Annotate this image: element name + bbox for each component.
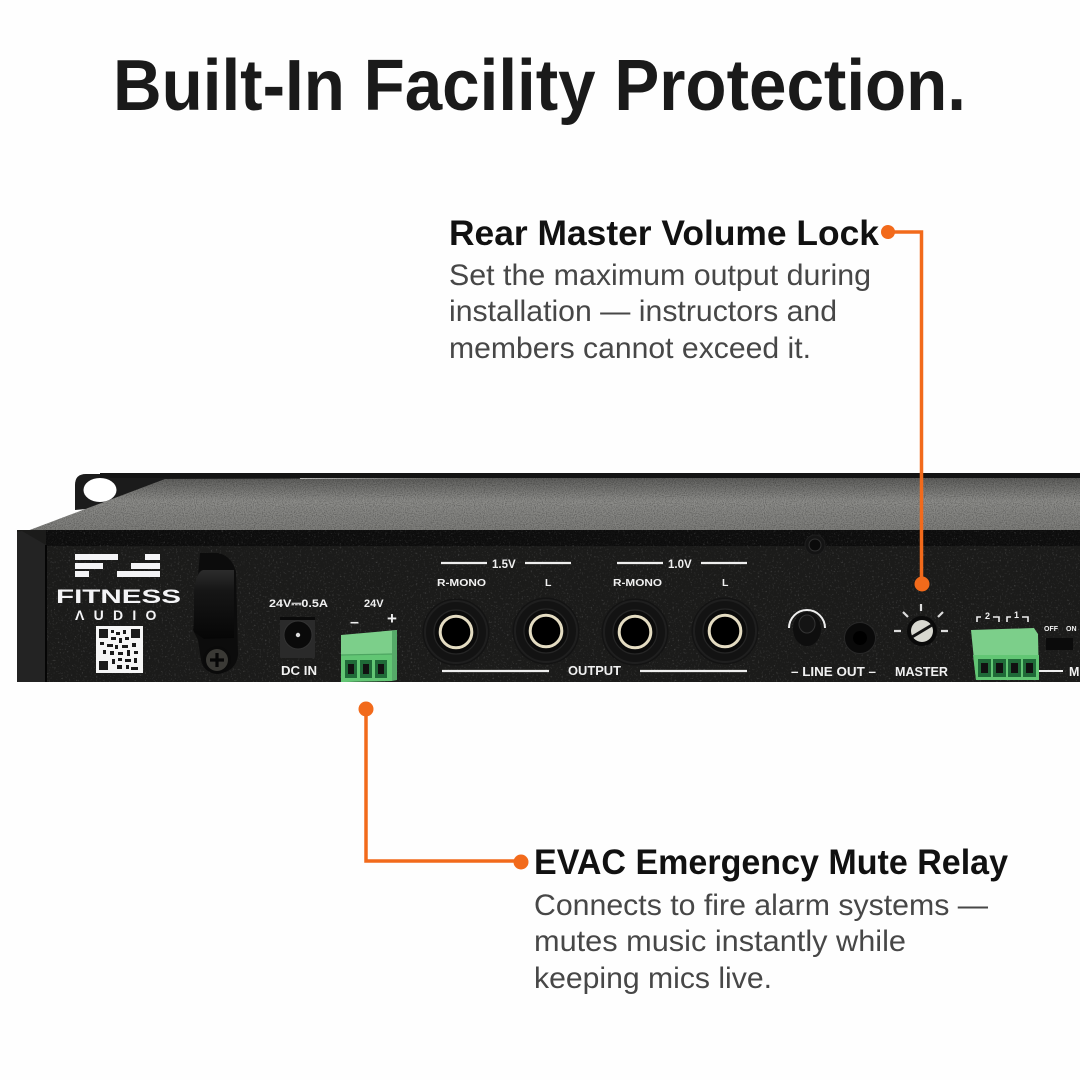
four-pin green terminal and mic zone controls: 1 [1014,610,1019,620]
cable clip and screw [193,553,238,674]
product: rear panel of amplifier [17,473,1080,682]
line out section [789,610,876,679]
text block: EVAC emergency mute relay [534,843,1009,995]
logo: Fitness Audio [56,554,181,623]
text block: rear master volume lock: Rear Master Volume Lock [449,214,880,253]
top surface [27,473,1080,531]
output section: R-MONO [613,577,662,589]
output section [422,559,758,678]
text block: EVAC emergency mute relay: Connects to fire alarm systems — [534,889,989,922]
DC in jack: DC IN [281,664,317,678]
four-pin green terminal and mic zone controls: OFF [1044,626,1059,633]
24V green terminal block (EVAC): – [350,614,359,631]
left side panel [17,531,46,682]
line out section: – LINE OUT – [791,665,876,679]
output section: 1.0V [668,559,692,571]
24V green terminal block (EVAC): 24V [364,598,384,610]
logo: Fitness Audio: FITNESS [56,587,181,608]
jack: 1.0V R-MONO [602,598,668,666]
top screw [805,535,825,555]
output section: 1.5V [492,559,516,571]
logo: Fitness Audio: ΛUDIO [75,607,161,623]
output section: L [722,577,729,589]
callout arrow: master volume [881,225,930,592]
title: Built-In Facility Protection. [113,46,966,126]
jack: 1.5V R-MONO [422,598,490,666]
24V green terminal block (EVAC) [341,598,397,682]
output section: L [545,577,552,589]
text block: rear master volume lock: installation — instructors and [449,295,837,328]
output section: OUTPUT [568,664,621,678]
four-pin green terminal and mic zone controls: 2 [985,611,990,621]
text block: EVAC emergency mute relay: keeping mics live. [534,962,772,995]
DC in jack [269,598,328,678]
text block: EVAC emergency mute relay: mutes music instantly while [534,925,906,958]
callout arrow: EVAC relay [358,702,528,870]
master volume knob: MASTER [895,665,948,679]
text block: rear master volume lock [449,214,880,365]
text block: rear master volume lock: members cannot exceed it. [449,332,811,365]
text block: rear master volume lock: Set the maximum output during [449,259,871,292]
jack: 1.0V L [692,598,758,664]
mounting ear [75,474,300,510]
QR code [96,626,143,673]
DC in jack: 24V⎓0.5A [269,598,328,610]
output section: R-MONO [437,577,486,589]
four-pin green terminal and mic zone controls: ON [1066,626,1076,633]
jack: 1.5V L [512,598,580,664]
four-pin green terminal and mic zone controls [971,610,1079,680]
text block: EVAC emergency mute relay: EVAC Emergency Mute Relay [534,843,1009,882]
24V green terminal block (EVAC): + [387,609,397,628]
four-pin green terminal and mic zone controls: M [1069,665,1079,679]
front face [17,530,1080,682]
master volume knob [894,604,948,679]
